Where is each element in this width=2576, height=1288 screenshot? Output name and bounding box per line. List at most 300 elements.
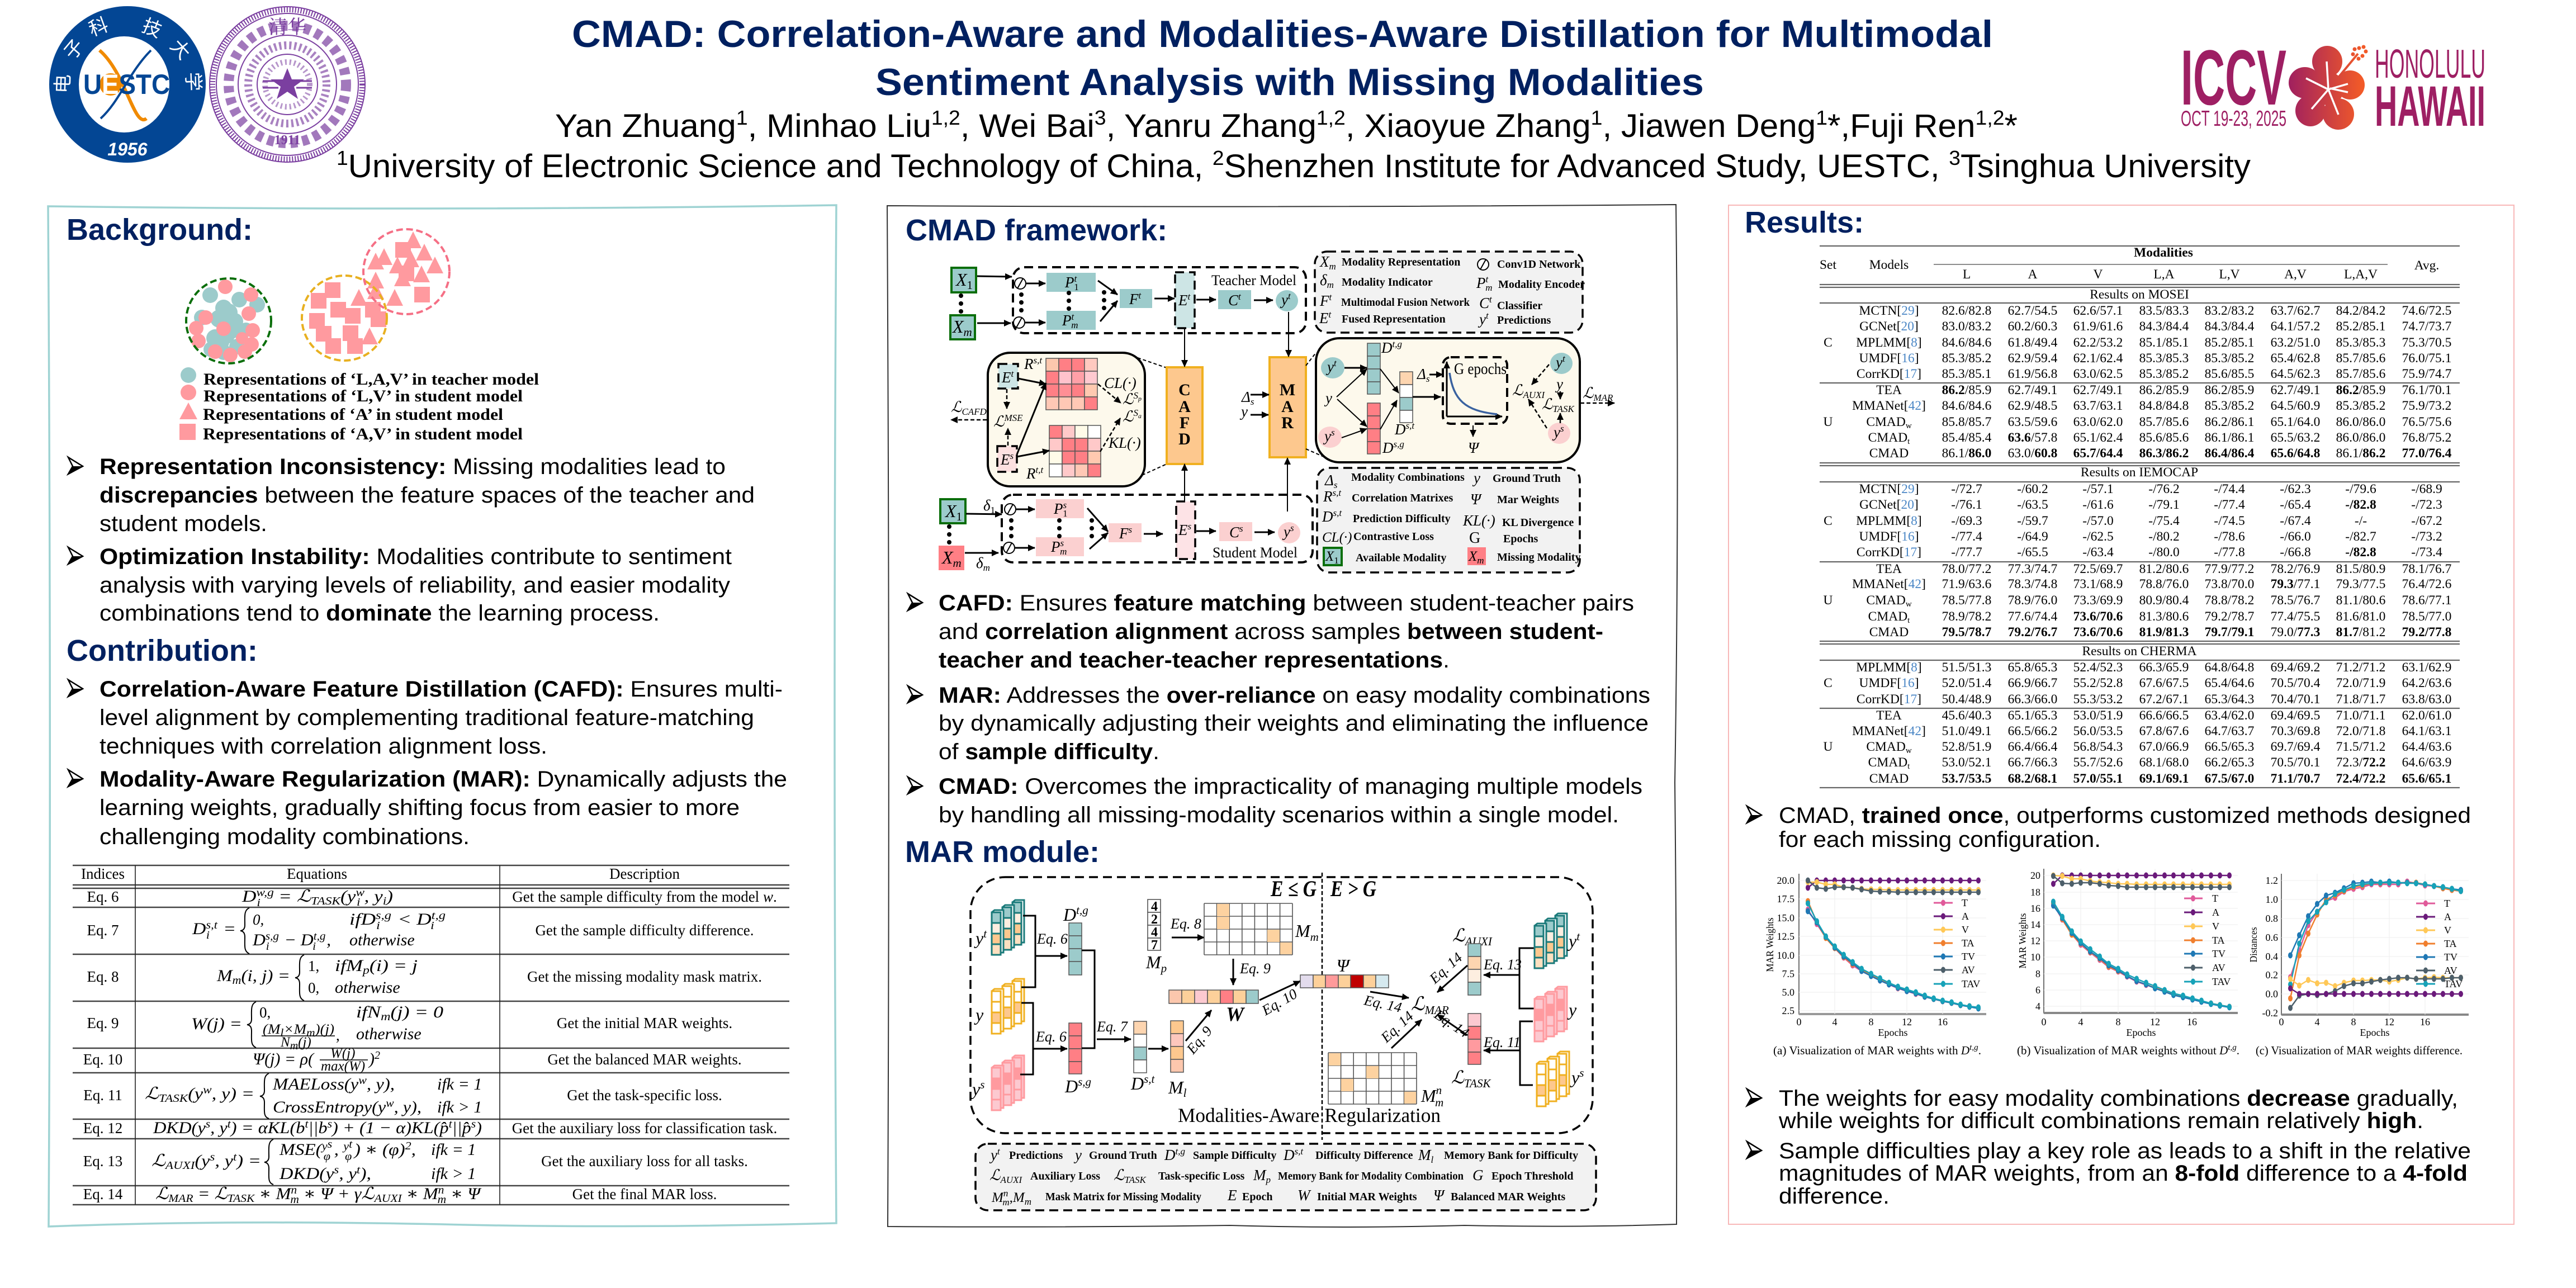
legend: representations: Representations of ‘L,A,V’ in teacher model <box>203 370 539 389</box>
equation: Eq. 12: DKD(y <box>153 1119 202 1137</box>
equation: Eq. 13: ) ∗ (φ) <box>353 1140 405 1159</box>
CAFD detail: ℒ <box>1123 391 1133 408</box>
student model: s <box>1290 523 1294 533</box>
results on IEMOCAP: -/62.3 <box>2280 482 2311 496</box>
equation: Eq. 12: ) + (1 − α)KL(p̂ <box>331 1119 449 1137</box>
legend: MAR symbols: M <box>1253 1167 1266 1183</box>
affiliations: 1 <box>337 146 348 169</box>
results on MOSEI: 76.1/70.1 <box>2402 383 2451 397</box>
results on CHERMA: 66.9/66.7 <box>2008 676 2058 690</box>
diagram: MAR module: Eq. 14 <box>1426 949 1465 987</box>
legend: framework symbols top: Classifier <box>1497 300 1542 312</box>
text: representation inconsistency: student models. <box>100 512 267 536</box>
teacher model: t <box>1071 311 1074 322</box>
results on IEMOCAP <box>1824 465 2452 640</box>
legend: AV <box>2444 965 2457 976</box>
legend: framework symbols bottom: Mar Weights <box>1497 494 1559 506</box>
chart: MAR weights without difficulty: 12 <box>2030 935 2040 946</box>
results on MOSEI: 62.6/57.1 <box>2073 304 2123 318</box>
results on CHERMA: UMDF[16] <box>1859 676 1919 690</box>
results on IEMOCAP: 79.0/77.3 <box>2271 625 2320 640</box>
logo: ICCV Honolulu Hawaii: ICCV <box>2181 34 2286 121</box>
results on IEMOCAP: C <box>1824 514 1832 528</box>
results on CHERMA: 67.8/67.6 <box>2139 724 2189 738</box>
legend: framework symbols bottom: y <box>1472 470 1480 486</box>
results on IEMOCAP: 78.5/77.8 <box>1942 593 1991 608</box>
results on IEMOCAP: -/61.6 <box>2082 498 2114 512</box>
equation: Eq. 8: p <box>362 964 370 977</box>
results on CHERMA: CMAD <box>1866 740 1912 755</box>
legend: MAR symbols: Predictions <box>1009 1149 1063 1162</box>
student model: m <box>953 556 962 570</box>
authors: , Xiaoyue Zhang <box>1346 108 1591 144</box>
equation: Eq. 11: w <box>386 1097 394 1110</box>
results on IEMOCAP: -/72.7 <box>1951 482 1982 496</box>
results on CHERMA: 64.8/64.8 <box>2205 660 2254 675</box>
equation: Eq. 13: (y <box>195 1152 210 1170</box>
CAFD detail: t <box>1011 368 1014 379</box>
MAR detail: TASK <box>1552 404 1575 414</box>
results on MOSEI: U <box>1824 415 1833 429</box>
results on MOSEI: CorrKD[17] <box>1857 367 1921 381</box>
student model: s <box>1128 524 1133 535</box>
legend: framework symbols bottom: X <box>1469 549 1477 564</box>
results on IEMOCAP: MMANet[42] <box>1852 577 1926 591</box>
legend: MAR symbols: W <box>1298 1187 1311 1204</box>
chart: MAR weights difference: 1.2 <box>2265 875 2278 886</box>
authors: 1,2 <box>931 106 960 129</box>
results on CHERMA: 72.0/71.8 <box>2336 724 2385 738</box>
results on MOSEI: 64.1/57.2 <box>2271 319 2320 334</box>
equation: Eq. 7: i <box>376 920 380 932</box>
connecting arrows <box>1185 312 1289 512</box>
results on CHERMA: 68.1/68.0 <box>2139 755 2189 770</box>
equation: Eq. 13: 2 <box>405 1140 411 1152</box>
legend: framework symbols bottom: R <box>1323 488 1333 505</box>
equation: Eq. 8: M <box>217 967 231 985</box>
equation: Eq. 11: , y) = <box>212 1085 254 1103</box>
results on MOSEI: 86.2/85.9 <box>2336 383 2385 397</box>
results on IEMOCAP: -/73.4 <box>2411 545 2442 560</box>
results on IEMOCAP: GCNet[20] <box>1859 498 1919 512</box>
text: MAR: MAR: Addresses the over-reliance on easy modality combinations <box>939 683 1650 708</box>
equation: Eq. 9: (M <box>263 1022 279 1037</box>
chart: MAR weights without difficulty: 4 <box>2035 1001 2040 1012</box>
legend: framework symbols top: Modality Encoder <box>1498 278 1585 291</box>
results on CHERMA: CMAD <box>1868 755 1910 771</box>
diagram: MAR module: Eq. 8 <box>1170 916 1201 932</box>
equation: Eq. 6: w,g <box>256 887 274 899</box>
right prediction stacks: y <box>1569 931 1576 951</box>
results on MOSEI: 65.1/64.0 <box>2271 415 2320 429</box>
caption a: . <box>1978 1044 1981 1057</box>
chart: MAR weights difference: 0.8 <box>2265 913 2278 924</box>
results on IEMOCAP: -/76.1 <box>1951 498 1982 512</box>
results on MOSEI: 65.5/63.2 <box>2271 430 2320 445</box>
results on IEMOCAP: 81.5/80.9 <box>2336 562 2385 576</box>
equation: Eq. 7: − D <box>280 931 314 949</box>
legend: A <box>1962 911 1969 922</box>
student model: s <box>1187 521 1192 532</box>
results on IEMOCAP: 73.1/68.9 <box>2073 577 2123 591</box>
results on IEMOCAP: 78.1/76.7 <box>2402 562 2452 576</box>
results on CHERMA: 56.0/53.5 <box>2073 724 2123 738</box>
results on MOSEI: t <box>1907 437 1910 446</box>
CAFD detail: KL(·) <box>1108 434 1141 451</box>
text: MAR contribution <box>68 767 787 849</box>
legend: MAR symbols: ,M <box>1010 1190 1025 1205</box>
logo: Tsinghua: 1911 <box>274 133 300 148</box>
text: sample difficulties: Sample difficulties play a key role as leads to a shift in the relative <box>1779 1139 2471 1163</box>
equation: Eq. 14: n <box>438 1184 444 1196</box>
logo: UESTC: 1956 <box>107 139 148 159</box>
table header <box>1820 245 2439 282</box>
left prediction stacks: y <box>976 928 983 948</box>
results on MOSEI: 85.1/85.1 <box>2139 335 2189 350</box>
chart: MAR weights with difficulty: 0 <box>1797 1016 1801 1027</box>
table: equations: Get the missing modality mask matrix. <box>527 968 762 985</box>
student model: δ <box>983 497 991 514</box>
equation: Eq. 13: φ <box>345 1150 352 1163</box>
equation: Eq. 13: DKD(y <box>280 1164 328 1183</box>
MAR block <box>1270 357 1306 457</box>
MAR block: A <box>1281 397 1294 416</box>
auxiliary and task loss bars: ℒ <box>1452 925 1465 945</box>
results on IEMOCAP: -/59.7 <box>2017 514 2048 528</box>
legend: framework symbols top: y <box>1479 311 1486 328</box>
CAFD detail: S <box>1133 390 1138 401</box>
results on IEMOCAP: 78.2/76.9 <box>2271 562 2320 576</box>
equation: Eq. 12: s <box>206 1118 210 1130</box>
equation: Eq. 10: 2 <box>375 1049 380 1062</box>
CAFD detail: ℒ <box>993 413 1004 430</box>
equation: Eq. 7: s,g <box>376 910 391 922</box>
text: trained once <box>1747 803 2471 852</box>
results on MOSEI: 84.2/84.2 <box>2336 304 2385 318</box>
results on MOSEI: 65.6/64.8 <box>2271 446 2320 461</box>
results on IEMOCAP: 81.3/80.6 <box>2139 609 2189 624</box>
authors: 1,2 <box>1976 106 2005 129</box>
equation: Eq. 10 <box>253 1046 380 1074</box>
diagram: MAR module: M <box>1168 1077 1183 1097</box>
table: equations <box>73 865 789 1206</box>
results on MOSEI: 74.7/73.7 <box>2402 319 2452 334</box>
legend: TA <box>2444 938 2457 949</box>
legend: framework symbols bottom: Ground Truth <box>1493 472 1561 485</box>
results on IEMOCAP: 73.3/69.9 <box>2073 593 2123 608</box>
legend: MAR symbols: AUXI <box>1000 1175 1022 1185</box>
equation: Eq. 14: = ℒ <box>193 1185 228 1203</box>
diagram: MAR module: M <box>1421 1086 1436 1106</box>
text: MAR contribution: challenging modality combinations. <box>100 825 470 849</box>
heading: Contribution: Contribution: <box>67 634 258 667</box>
results on CHERMA: CMAD <box>1869 771 1909 786</box>
title <box>572 13 1993 103</box>
results on MOSEI: 63.2/51.0 <box>2271 335 2320 350</box>
chart: MAR weights without difficulty: 4 <box>2078 1016 2083 1027</box>
legend: V <box>2212 921 2219 932</box>
table: equations: Eq. 10 <box>83 1051 122 1068</box>
chart: MAR weights with difficulty: MAR Weights <box>1764 918 1775 972</box>
panel: background and contribution <box>48 205 836 1227</box>
logo: ICCV Honolulu Hawaii <box>2181 34 2485 138</box>
diagram: MAR module: s,t <box>1144 1072 1156 1086</box>
results on CHERMA: 71.1/70.7 <box>2271 771 2321 786</box>
legend: framework symbols bottom: KL Divergence <box>1502 517 1574 529</box>
results on MOSEI: 65.7/64.4 <box>2073 446 2123 461</box>
legend: MAR symbols: Ground Truth <box>1089 1149 1157 1162</box>
CAFD detail: S <box>1133 408 1138 418</box>
equation: Eq. 10: Ψ(j) = ρ( <box>253 1050 315 1068</box>
caption: Modalities-Aware Regularization: Modalities-Aware Regularization <box>1178 1104 1441 1126</box>
equation: Eq. 13: ℒ <box>151 1152 164 1170</box>
results on MOSEI: 85.6/85.5 <box>2205 367 2254 381</box>
teacher model: t <box>1187 291 1191 302</box>
results on IEMOCAP: 81.1/80.6 <box>2336 593 2386 608</box>
results on MOSEI: 62.1/62.4 <box>2073 351 2123 366</box>
results on CHERMA: 70.5/70.1 <box>2271 755 2320 770</box>
legend: MAR symbols: G <box>1472 1167 1484 1183</box>
results on CHERMA: 72.4/72.2 <box>2336 771 2385 786</box>
MAR detail: s <box>1560 423 1564 434</box>
results on MOSEI: 76.5/75.6 <box>2402 415 2452 429</box>
legend: MAR symbols: D <box>1164 1147 1175 1163</box>
diagram: MAR module: Eq. 14 <box>1377 1008 1417 1046</box>
student model: X <box>942 547 953 567</box>
diagram: MAR module: E > G <box>1330 876 1376 901</box>
legend: framework symbols bottom: X <box>1325 549 1334 564</box>
text: sample difficulties: magnitudes of MAR weights, from an 8-fold difference to a 4-fold <box>1779 1161 2468 1186</box>
panel: framework and MAR module <box>887 205 1678 1227</box>
CAFD block <box>1167 367 1202 464</box>
text: CAFD contribution: level alignment by complementing traditional feature-matching <box>100 705 754 730</box>
legend: MAR symbols: Initial MAR Weights <box>1317 1191 1417 1203</box>
legend: framework symbols bottom <box>1317 468 1580 572</box>
legend: MAR symbols: t <box>997 1146 1001 1157</box>
chart: MAR weights with difficulty: Epochs <box>1878 1027 1907 1038</box>
results on MOSEI: 85.2/85.1 <box>2205 335 2254 350</box>
diagram: MAR module: MAR <box>1424 1003 1449 1017</box>
results on IEMOCAP: -/69.3 <box>1951 514 1982 528</box>
results on IEMOCAP: -/67.2 <box>2411 514 2442 528</box>
left prediction stacks: y <box>974 1005 984 1025</box>
memory bank Mp: M <box>1146 952 1161 972</box>
legend: MAR symbols: m <box>1002 1197 1010 1208</box>
authors: 1,2 <box>1317 106 1346 129</box>
equation: Eq. 13: ifk = 1 <box>431 1140 476 1159</box>
results on IEMOCAP: -/80.0 <box>2148 545 2180 560</box>
diagram: MAR module: m <box>1435 1096 1443 1109</box>
memory bank Mp: 7 <box>1151 938 1158 953</box>
legend: framework symbols top: t <box>1328 309 1332 320</box>
legend: framework symbols bottom: CL(·) <box>1322 530 1352 545</box>
equation: Eq. 9: m <box>306 1027 315 1039</box>
legend <box>2184 893 2231 987</box>
legend: framework symbols top: t <box>1486 274 1489 285</box>
results on IEMOCAP: 81.6/81.0 <box>2336 609 2385 624</box>
equation: Eq. 12: ) = αKL(b <box>230 1119 305 1137</box>
legend: framework symbols top: m <box>1485 282 1493 293</box>
text: MAR: of sample difficulty . <box>939 740 1159 764</box>
equation: Eq. 7: < D <box>392 910 432 929</box>
equation: Eq. 9: W(j) = <box>191 1015 242 1033</box>
results on IEMOCAP: 80.9/80.4 <box>2139 593 2189 608</box>
equation: Eq. 11: , y), <box>394 1098 422 1116</box>
legend: TV <box>2212 948 2225 959</box>
equation: Eq. 13: s <box>334 1164 339 1176</box>
equation: Eq. 8: (i) = j <box>370 956 418 975</box>
legend: framework symbols bottom: s <box>1334 480 1338 490</box>
teacher model: X <box>956 269 967 290</box>
results on CHERMA: w <box>1906 746 1912 755</box>
results on IEMOCAP: UMDF[16] <box>1859 529 1919 544</box>
legend: representations: Representations of ‘A’ in student model <box>203 405 503 424</box>
equation: Eq. 13: AUXI <box>164 1159 196 1172</box>
CAFD detail: R <box>1024 356 1033 372</box>
MAR detail: D <box>1395 421 1405 438</box>
legend: MAR symbols: M <box>992 1190 1003 1205</box>
legend: MAR symbols: Balanced MAR Weights <box>1451 1191 1565 1203</box>
results on MOSEI: 86.0/86.0 <box>2336 415 2385 429</box>
legend: MAR symbols: s,t <box>1295 1146 1304 1157</box>
equation: Eq. 12: t <box>449 1118 452 1130</box>
equation: Eq. 9 <box>191 1002 443 1052</box>
legend: MAR symbols: D <box>1284 1147 1295 1163</box>
equation: Eq. 9: 0, <box>259 1004 271 1021</box>
legend: framework symbols top: C <box>1479 295 1489 311</box>
matrix: teacher-teacher correlation <box>1049 425 1101 477</box>
table: equations: Eq. 9 <box>87 1015 119 1031</box>
caption a: t,g <box>1969 1043 1978 1052</box>
chart: MAR weights without difficulty: 6 <box>2035 984 2040 996</box>
results on IEMOCAP: 73.8/70.0 <box>2205 577 2254 591</box>
auxiliary and task loss bars: ℒ <box>1451 1067 1464 1087</box>
right prediction stacks: s <box>1579 1066 1584 1079</box>
teacher model: t <box>1288 291 1291 301</box>
results on MOSEI: 86.0/86.0 <box>2336 430 2385 445</box>
results on CHERMA <box>1824 644 2452 786</box>
results on CHERMA: 71.8/71.7 <box>2336 692 2386 707</box>
MAR detail: y <box>1324 428 1331 444</box>
table: equations: Get the auxiliary loss for classification task. <box>512 1120 777 1137</box>
equation: Eq. 12: t <box>305 1118 309 1130</box>
equation: Eq. 11 <box>145 1073 482 1119</box>
results on MOSEI: 85.7/85.6 <box>2139 415 2189 429</box>
results on MOSEI: C <box>1824 335 1832 350</box>
legend: MAR symbols: Sample Difficulty <box>1193 1149 1276 1162</box>
text: optimization instability: Optimization Instability: Modalities contribute to sentiment <box>100 544 732 569</box>
legend: MAR symbols: Auxiliary Loss <box>1030 1170 1100 1182</box>
equation: Eq. 10: ) <box>369 1050 375 1068</box>
results on IEMOCAP: -/65.5 <box>2017 545 2048 560</box>
student model: F <box>1119 525 1128 542</box>
results on CHERMA: 64.1/63.1 <box>2402 724 2451 738</box>
equation: Eq. 7: s,g <box>266 930 279 943</box>
teacher model: X <box>953 316 964 337</box>
results on MOSEI: Results on MOSEI <box>2090 287 2189 302</box>
results on IEMOCAP: 76.4/72.6 <box>2402 577 2452 591</box>
results on MOSEI: 62.9/48.5 <box>2008 399 2057 413</box>
CAFD block: A <box>1178 397 1191 416</box>
results on MOSEI: 62.2/53.2 <box>2073 335 2123 350</box>
legend: MAR symbols: Epoch Threshold <box>1491 1170 1574 1182</box>
legend: MAR symbols: E <box>1227 1187 1237 1204</box>
diagram: MAR module: ℒ <box>1411 994 1424 1015</box>
results on IEMOCAP: -/63.4 <box>2082 545 2114 560</box>
chart: MAR weights without difficulty: 12 <box>2150 1016 2160 1027</box>
student model: m <box>983 562 990 573</box>
results on MOSEI: 85.8/85.7 <box>1942 415 1992 429</box>
teacher model: t <box>1138 290 1142 301</box>
results on MOSEI: 62.9/59.4 <box>2008 351 2058 366</box>
affiliations: 2 <box>1213 146 1224 169</box>
results on CHERMA: 69.1/69.1 <box>2139 771 2189 786</box>
legend: framework symbols bottom: Prediction Difficulty <box>1353 513 1451 525</box>
equation: Eq. 13: , y <box>215 1152 234 1170</box>
memory bank Mp: 2 <box>1151 912 1158 927</box>
teacher model: 1 <box>1074 282 1079 292</box>
chart: MAR weights without difficulty: 8 <box>2035 968 2040 979</box>
connecting arrows: y <box>1239 403 1248 420</box>
results on MOSEI: 83.2/83.2 <box>2205 304 2254 318</box>
results on IEMOCAP: CorrKD[17] <box>1857 545 1921 560</box>
MAR detail: y <box>1554 424 1560 441</box>
results on IEMOCAP: 79.2/76.7 <box>2008 625 2058 640</box>
diagram: MAR module <box>970 873 1596 1210</box>
results on CHERMA: 64.2/63.6 <box>2402 676 2452 690</box>
chart: MAR weights with difficulty: 10.0 <box>1777 950 1794 961</box>
equation: Eq. 7: ifD <box>349 910 371 929</box>
results on MOSEI: TEA <box>1876 383 1902 397</box>
results on IEMOCAP: CMAD <box>1869 625 1909 640</box>
CAFD detail: t,t <box>1035 465 1044 475</box>
heading: CMAD framework: CMAD framework: <box>906 214 1167 247</box>
chart: MAR weights without difficulty: 18 <box>2030 887 2040 898</box>
caption a: (a) Visualization of MAR weights with D <box>1773 1044 1969 1057</box>
results on IEMOCAP: 73.6/70.6 <box>2073 609 2123 624</box>
MAR detail: y <box>1324 390 1332 406</box>
results on CHERMA: 67.6/67.5 <box>2139 676 2189 690</box>
equation: Eq. 12: s <box>328 1118 332 1130</box>
results on CHERMA: 68.2/68.1 <box>2008 771 2057 786</box>
legend <box>1934 897 1980 989</box>
results on CHERMA: 64.6/63.9 <box>2402 755 2451 770</box>
results on MOSEI <box>1824 287 2452 461</box>
diagram: MAR module: Eq. 6 <box>1035 1029 1067 1045</box>
equation: Eq. 10: W(j) <box>330 1046 355 1061</box>
legend: T <box>1962 897 1968 908</box>
results on CHERMA: 53.0/51.9 <box>2073 708 2123 723</box>
results on CHERMA: 67.2/67.1 <box>2139 692 2189 707</box>
results on IEMOCAP: -/65.4 <box>2280 498 2311 512</box>
MAR detail: AUXI <box>1522 390 1545 400</box>
results on CHERMA: 55.7/52.6 <box>2073 755 2123 770</box>
results on MOSEI: 85.3/85.2 <box>2205 399 2254 413</box>
equation: Eq. 7: i <box>266 940 269 953</box>
student model: s <box>1063 500 1067 510</box>
diagram: MAR module: D <box>1131 1073 1144 1093</box>
teacher model: 1 <box>967 278 973 292</box>
results on MOSEI: 86.4/86.4 <box>2205 446 2255 461</box>
text: CAFD: teacher and teacher-teacher representations . <box>939 648 1450 673</box>
results on IEMOCAP: t <box>1907 616 1910 625</box>
equation: Eq. 9: m <box>381 1011 391 1023</box>
table: equations: Description <box>609 865 680 882</box>
results on MOSEI: 85.3/85.3 <box>2139 351 2189 366</box>
text: CAFD: and correlation alignment across samples between student- <box>939 619 1603 644</box>
MAR detail: G epochs <box>1454 361 1507 378</box>
results on MOSEI: 63.0/62.5 <box>2073 367 2123 381</box>
